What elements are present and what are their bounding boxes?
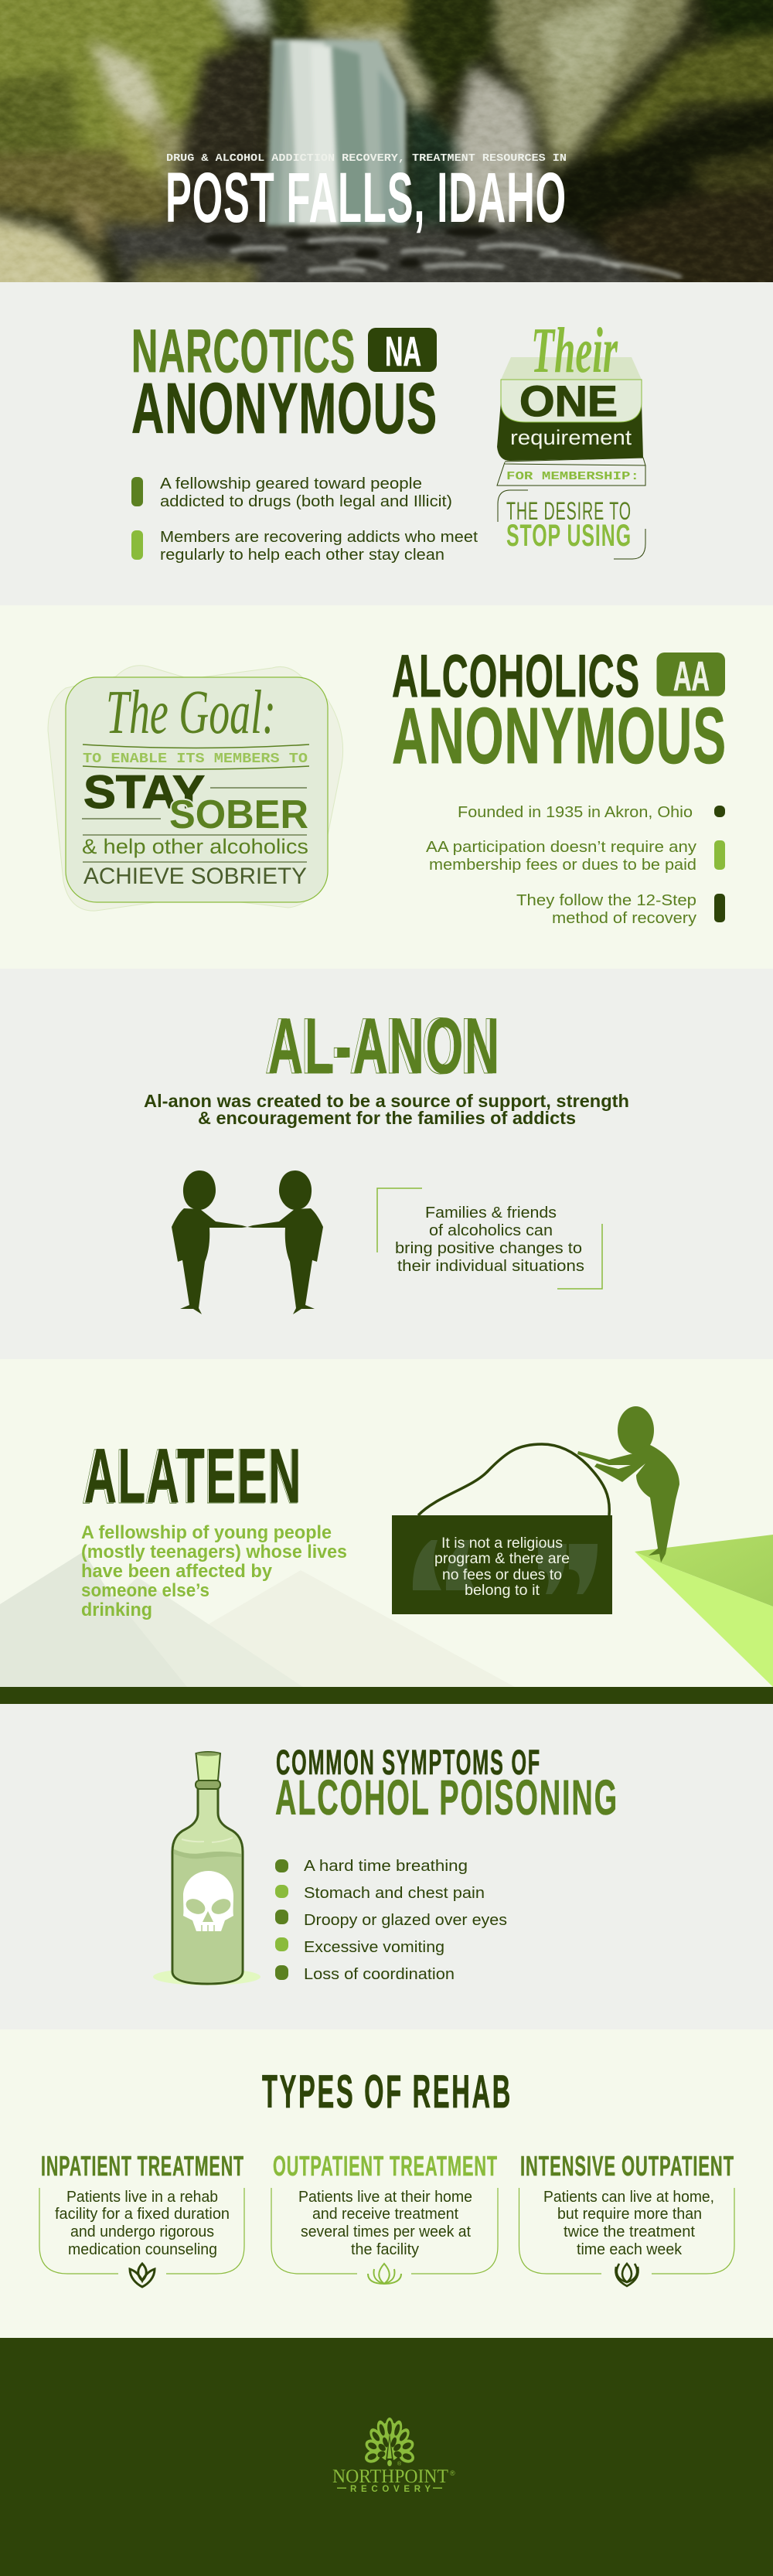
sign: quote box xyxy=(392,1515,612,1614)
badge: NA: NA xyxy=(385,329,421,375)
icon: lotus light xyxy=(368,2264,401,2284)
bracket and answer: STOP USING xyxy=(506,519,632,553)
section backgrounds xyxy=(0,282,773,2338)
callout: families and friends xyxy=(377,1188,602,1289)
text: fellowship: A fellowship geared toward people xyxy=(160,475,422,492)
background mountains xyxy=(0,1552,515,1687)
heading: types of rehab: TYPES OF REHAB xyxy=(262,2066,512,2118)
footer xyxy=(0,2338,773,2576)
ribbon: for membership xyxy=(497,458,645,486)
bullet marker xyxy=(131,477,143,506)
heading: alateen xyxy=(82,1433,302,1520)
heading: common symptoms of: COMMON SYMPTOMS OF xyxy=(276,1743,541,1782)
logo wordmark: ® xyxy=(397,2461,402,2467)
text: members: Members are recovering addicts who meet xyxy=(160,529,478,546)
text: intro: & encouragement for the families of addicts xyxy=(198,1108,576,1128)
card: intensive outpatient: Patients can live at home, xyxy=(543,2189,714,2206)
badge: AA: AA xyxy=(673,653,710,700)
callout: families and friends: their individual situations xyxy=(397,1258,584,1275)
panel: alateen xyxy=(0,1406,773,1687)
logo wordmark xyxy=(332,2461,455,2494)
heading: alateen: ALATEEN xyxy=(82,1433,301,1520)
word: sober: SOBER xyxy=(169,792,308,837)
text: fees: AA participation doesn’t require any xyxy=(426,839,696,856)
callout: families and friends: Families & friends xyxy=(425,1205,557,1222)
card: intensive outpatient xyxy=(519,2150,734,2286)
text: 12-step xyxy=(516,892,696,927)
text: intro xyxy=(144,1091,629,1128)
card: intensive outpatient: time each week xyxy=(577,2241,683,2258)
badge: NA xyxy=(368,328,437,375)
banner: to enable its members to: TO ENABLE ITS MEMBERS TO xyxy=(83,751,308,767)
text: fellowship xyxy=(160,475,452,510)
text: fellowship of young people xyxy=(81,1522,347,1620)
logo wordmark: RECOVERY xyxy=(350,2485,431,2494)
callout: their one requirement xyxy=(497,315,645,559)
illustration: poison bottle xyxy=(153,1752,261,1985)
badge: AA xyxy=(657,653,725,700)
card: inpatient: medication counseling xyxy=(68,2241,217,2258)
icon: lotus dark xyxy=(130,2264,155,2287)
text: intro: Al-anon was created to be a source of support, strength xyxy=(144,1091,629,1111)
symptom list: Droopy or glazed over eyes xyxy=(304,1912,507,1929)
card: intensive outpatient: but require more than xyxy=(557,2206,702,2223)
card: outpatient xyxy=(271,2150,498,2284)
ribbon: for membership: FOR MEMBERSHIP: xyxy=(506,470,639,483)
panel: the goal card xyxy=(48,666,343,911)
sign: quote box: It is not a religious xyxy=(441,1535,563,1552)
text: founded: Founded in 1935 in Akron, Ohio xyxy=(458,804,693,821)
bracket and answer: THE DESIRE TO xyxy=(506,497,632,525)
symptom list: Stomach and chest pain xyxy=(304,1885,485,1902)
waterfall xyxy=(267,39,406,226)
symptom list: Excessive vomiting xyxy=(304,1939,444,1956)
text: members xyxy=(160,529,478,564)
bracket and answer xyxy=(498,490,645,559)
cork xyxy=(196,1752,220,1780)
script heading: the goal: The Goal: xyxy=(106,679,276,747)
symptom list xyxy=(275,1858,507,1983)
panel: alcohol poisoning xyxy=(153,1743,618,1985)
callout: families and friends: bring positive changes to xyxy=(395,1240,582,1257)
heading: al-anon: AL-ANON xyxy=(268,1002,501,1090)
card: inpatient: and undergo rigorous xyxy=(70,2223,214,2240)
logo wordmark: NORTHPOINT xyxy=(332,2466,448,2487)
text: 12-step: method of recovery xyxy=(552,910,696,927)
heading: al-anon: AL-ANON xyxy=(265,1002,497,1090)
text: members: regularly to help each other stay clean xyxy=(160,547,444,564)
bullet marker xyxy=(131,530,143,560)
card: inpatient xyxy=(39,2150,244,2287)
logo: peacock fan xyxy=(364,2418,415,2466)
card: inpatient: facility for a fixed duration xyxy=(55,2206,230,2223)
bullet marker xyxy=(714,894,725,922)
text: fellowship of young people: someone else’s xyxy=(81,1580,209,1601)
bullet marker xyxy=(714,806,725,817)
text: help other alcoholics: & help other alcoholics xyxy=(82,835,308,858)
illustration: two people shaking hands xyxy=(172,1170,323,1314)
rope xyxy=(418,1444,609,1515)
hero: waterfall photo illustration xyxy=(0,0,773,302)
banner: to enable its members to xyxy=(83,745,309,769)
text: fellowship of young people: have been affected by xyxy=(81,1561,273,1582)
card: outpatient: OUTPATIENT TREATMENT xyxy=(273,2150,498,2182)
text: fellowship of young people: (mostly teenagers) whose lives xyxy=(81,1542,347,1562)
script word: their: Their xyxy=(531,315,618,387)
rock texture overlay xyxy=(0,0,773,282)
panel: al-anon xyxy=(144,1002,629,1314)
text: fellowship of young people: drinking xyxy=(81,1600,152,1620)
stream rocks and rapids xyxy=(205,227,680,277)
symptom list: A hard time breathing xyxy=(304,1858,468,1875)
symptom list: Loss of coordination xyxy=(304,1966,455,1983)
figure pulling sign xyxy=(577,1406,679,1562)
sign: quote box: belong to it xyxy=(465,1583,540,1599)
word: stay: STAY xyxy=(83,766,205,818)
heading: al-anon xyxy=(265,1002,501,1090)
bullet marker xyxy=(714,840,725,870)
heading: anonymous: ANONYMOUS xyxy=(131,368,438,448)
skull xyxy=(183,1871,233,1931)
card: inpatient: Patients live in a rehab xyxy=(66,2189,218,2206)
text: 12-step: They follow the 12-Step xyxy=(516,892,696,909)
callout: families and friends: of alcoholics can xyxy=(429,1222,553,1239)
card: outpatient: several times per week at xyxy=(301,2223,471,2240)
text: achieve sobriety: ACHIEVE SOBRIETY xyxy=(83,864,307,889)
heading: narcotics: NARCOTICS xyxy=(131,316,356,385)
panel: narcotics anonymous xyxy=(131,316,478,564)
sign: quote box: no fees or dues to xyxy=(442,1567,562,1583)
hero subtitle: DRUG & ALCOHOL ADDICTION RECOVERY, TREATMENT RESOURCES IN xyxy=(166,152,567,165)
word: requirement: requirement xyxy=(510,426,632,449)
text: fellowship of young people: A fellowship of young people xyxy=(81,1522,332,1543)
word: one: ONE xyxy=(519,377,618,425)
text: fees: membership fees or dues to be paid xyxy=(429,857,696,874)
logo wordmark: ® xyxy=(450,2469,455,2477)
card: inpatient: INPATIENT TREATMENT xyxy=(41,2150,244,2182)
card: intensive outpatient: twice the treatment xyxy=(564,2223,695,2240)
panel: alcoholics anonymous xyxy=(392,642,727,927)
dark divider band xyxy=(0,1687,773,1704)
sign: quote box: program & there are xyxy=(434,1551,570,1567)
cliff xyxy=(635,1535,773,1687)
heading: alateen: ALATEEN xyxy=(84,1433,302,1518)
icon: lotus double xyxy=(615,2264,638,2286)
text: fellowship: addicted to drugs (both legal and Illicit) xyxy=(160,493,452,510)
card: outpatient: Patients live at their home xyxy=(298,2189,472,2206)
panel: types of rehab xyxy=(39,2066,734,2287)
text: fees xyxy=(426,839,696,874)
card: outpatient: the facility xyxy=(351,2241,419,2258)
card: outpatient: and receive treatment xyxy=(312,2206,458,2223)
